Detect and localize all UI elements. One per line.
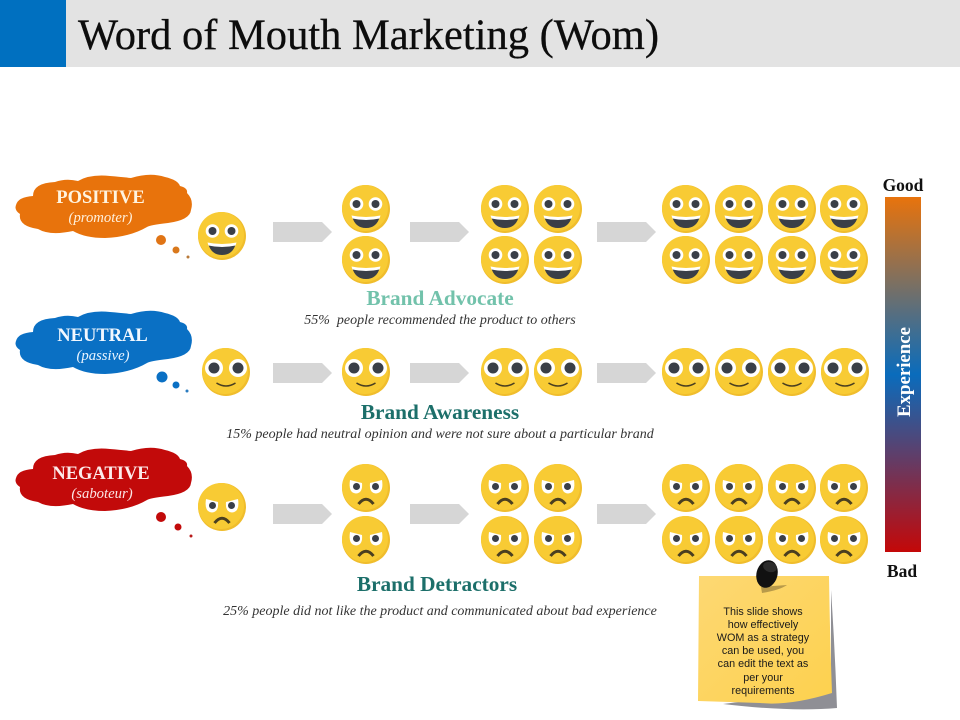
icon: push pin — [753, 558, 787, 593]
note text: can edit the text as — [718, 658, 809, 670]
note text — [717, 606, 810, 697]
text: awareness description: 15% people had neutral opinion and were not sure about a particular brand — [226, 427, 655, 442]
experience scale — [883, 175, 924, 581]
note text: This slide shows — [723, 606, 803, 618]
heading: brand detractors: Brand Detractors — [357, 572, 517, 596]
thought cloud: neutral — [16, 311, 192, 392]
thought cloud: neutral: (passive) — [76, 348, 130, 364]
thought cloud: negative: NEGATIVE — [52, 464, 150, 484]
row: negative faces — [198, 464, 868, 564]
row: negative arrows — [273, 504, 656, 524]
header bar — [0, 0, 960, 67]
experience scale: Good — [883, 175, 924, 195]
row: positive arrows — [273, 222, 656, 242]
experience scale: Experience — [894, 327, 915, 417]
note text: per your — [743, 672, 783, 684]
thought cloud: positive: POSITIVE — [56, 188, 145, 208]
text: advocate description: 55% people recommended the product to others — [304, 313, 576, 328]
note text: how effectively — [728, 619, 799, 631]
experience scale: Bad — [887, 561, 917, 581]
thought cloud: negative: (saboteur) — [71, 486, 133, 502]
thought cloud: negative — [16, 448, 192, 538]
row: neutral faces — [202, 348, 869, 396]
thought cloud: positive — [16, 175, 192, 258]
title: Word of Mouth Marketing (Wom) — [78, 12, 659, 59]
note text: WOM as a strategy — [717, 632, 810, 644]
thought cloud: neutral: NEUTRAL — [57, 326, 148, 346]
heading: brand awareness: Brand Awareness — [361, 400, 519, 424]
text: detractors description: 25% people did not like the product and communicated about bad experience — [223, 604, 657, 619]
note text: can be used, you — [722, 645, 804, 657]
thought cloud: positive: (promoter) — [69, 210, 133, 226]
heading: brand advocate: Brand Advocate — [366, 286, 514, 310]
row: positive faces — [198, 185, 868, 284]
row: neutral arrows — [273, 363, 656, 383]
sticky note — [698, 558, 837, 709]
note text: requirements — [731, 685, 795, 697]
